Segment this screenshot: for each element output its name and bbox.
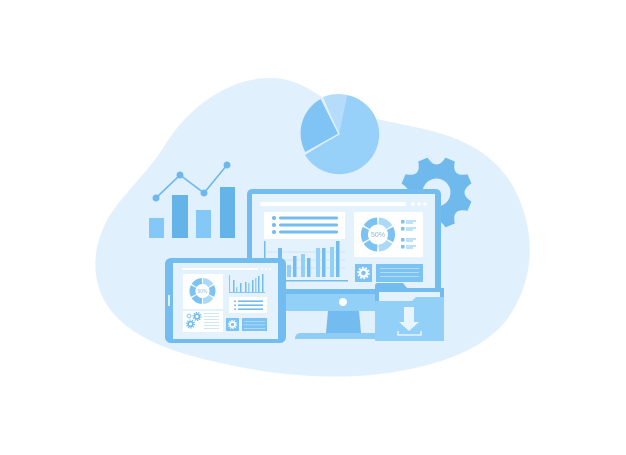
monitor: [247, 189, 441, 339]
tablet gears panel: [183, 311, 223, 332]
background blob: [95, 78, 530, 377]
monitor stand: [326, 311, 361, 333]
bar chart on monitor: [264, 241, 348, 282]
icon: pie chart: [300, 94, 379, 174]
list panel: [264, 212, 345, 239]
monitor base: [295, 333, 385, 339]
icon: download folder: [375, 283, 444, 341]
tablet lines tile: [242, 318, 267, 331]
tablet list panel: [229, 297, 267, 313]
browser bar: [260, 202, 427, 206]
gear tile: [355, 264, 372, 282]
donut panel: [354, 212, 423, 257]
tablet browser bar: [182, 268, 271, 270]
tablet bar chart: [229, 274, 265, 293]
bar and line chart: [149, 162, 235, 238]
tablet gear tile: [226, 318, 239, 331]
lines tile: [376, 264, 423, 282]
icon: gear: [402, 158, 471, 227]
tablet donut panel: 50%: [197, 289, 208, 295]
monitor frame: [247, 189, 441, 311]
donut panel: 50%: [371, 232, 385, 239]
tablet: [165, 258, 286, 343]
